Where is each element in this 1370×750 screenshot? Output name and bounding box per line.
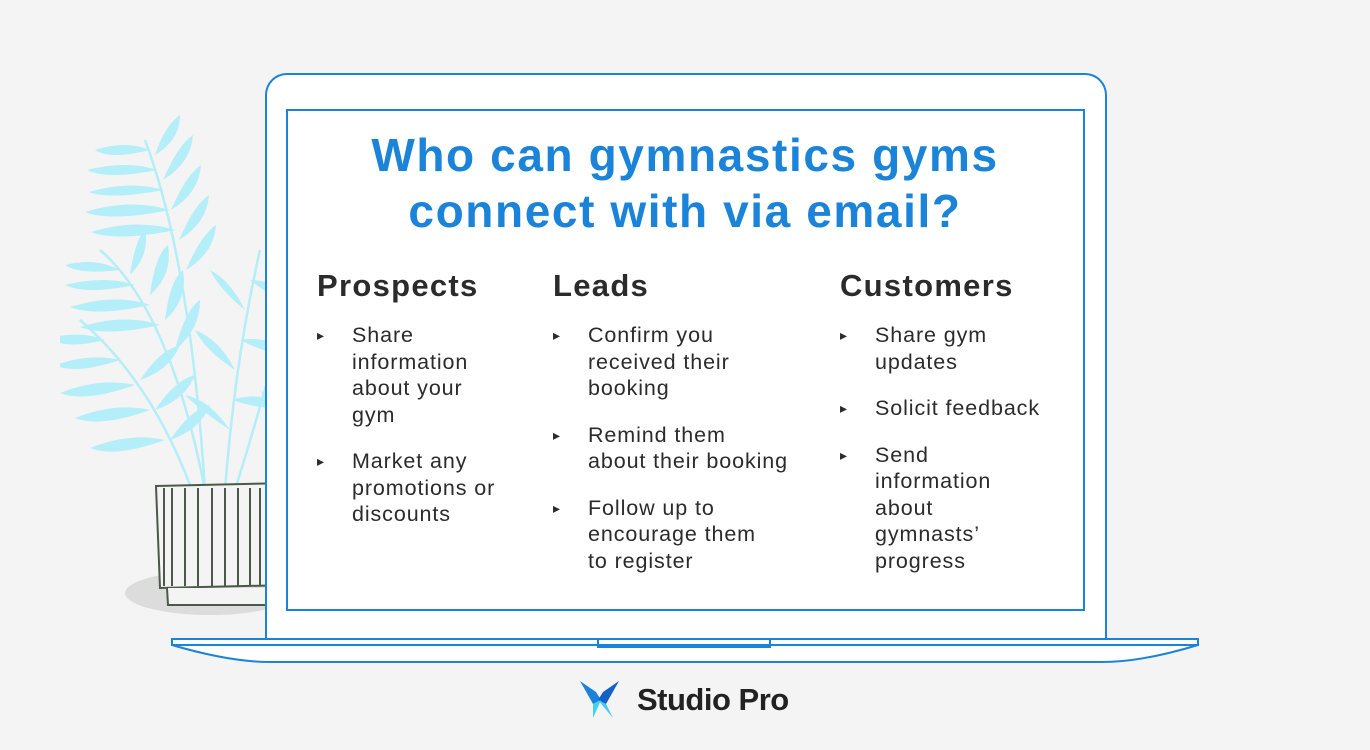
column: Customers: Share gym	[875, 323, 987, 347]
column: Leads: Confirm you	[588, 323, 714, 347]
title: Who can gymnastics gyms	[371, 129, 999, 181]
column: Leads: to register	[588, 548, 694, 572]
plant illustration	[60, 115, 265, 615]
title: connect with via email?	[408, 185, 962, 237]
column: Prospects: Market any	[352, 449, 467, 473]
column: Prospects: about your	[352, 376, 463, 400]
column: Customers: information	[875, 469, 991, 493]
column: Prospects: information	[352, 350, 468, 374]
laptop base	[171, 638, 1199, 663]
logo	[580, 681, 789, 718]
column: Customers: Send	[875, 442, 929, 466]
column: Prospects: Prospects	[317, 268, 479, 303]
column: Prospects: discounts	[352, 502, 451, 526]
column: Customers	[840, 268, 1040, 572]
column: Customers: Customers	[840, 268, 1014, 303]
title	[371, 129, 999, 237]
column: Prospects: Share	[352, 323, 414, 347]
screen	[286, 109, 1085, 611]
column: Customers: progress	[875, 548, 966, 572]
column: Leads: about their booking	[588, 449, 788, 473]
laptop lid	[265, 73, 1107, 645]
column: Leads: Follow up to	[588, 496, 715, 520]
column: Leads: Leads	[553, 268, 649, 303]
icon: logo mark	[580, 681, 619, 718]
column: Leads: encourage them	[588, 522, 756, 546]
column: Customers: Solicit feedback	[875, 396, 1040, 420]
column: Leads	[553, 268, 788, 572]
column: Leads: booking	[588, 376, 670, 400]
column: Leads: Remind them	[588, 422, 726, 446]
column: Customers: about	[875, 496, 933, 520]
column: Customers: gymnasts’	[875, 522, 980, 546]
column: Leads: received their	[588, 350, 730, 374]
brand name: Studio Pro	[637, 682, 789, 717]
column: Prospects: promotions or	[352, 476, 495, 500]
column: Prospects: gym	[352, 402, 395, 426]
column: Prospects	[317, 268, 495, 526]
column: Customers: updates	[875, 350, 958, 374]
